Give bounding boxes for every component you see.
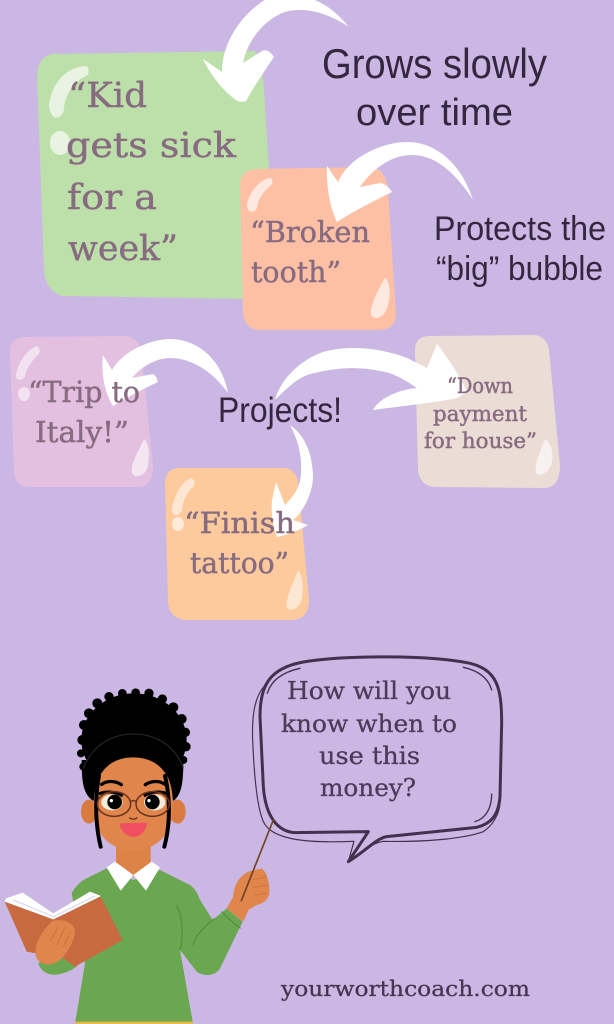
arrow: to trip bubble: [102, 339, 228, 406]
heading: protects the big bubble: [434, 210, 606, 288]
speech bubble: [252, 657, 502, 862]
illustration: teacher with book and pointer: [5, 688, 273, 1024]
footer: website: yourworthcoach.com: [280, 977, 530, 1001]
speech bubble text: money?: [320, 774, 416, 802]
book cover: [5, 897, 123, 967]
pointer stick: [241, 820, 273, 901]
panel: down payment bubble: [415, 335, 560, 488]
text: down payment for house: [424, 374, 537, 453]
text: broken tooth: “Broken: [250, 215, 370, 249]
sweater: [72, 868, 243, 1022]
text: kid gets sick: “Kid: [68, 76, 147, 116]
text: down payment for house: for house”: [424, 429, 537, 453]
left sleeve: [38, 937, 90, 975]
text: finish tattoo: [184, 506, 295, 580]
heading: protects the big bubble: “big” bubble: [436, 250, 603, 288]
face: [94, 757, 173, 851]
text: kid gets sick: week”: [68, 229, 178, 269]
text: finish tattoo: “Finish: [184, 506, 295, 540]
glasses: [97, 792, 169, 816]
text: kid gets sick: [66, 76, 237, 269]
panel: trip to Italy bubble: [10, 336, 153, 487]
speech bubble text: know when to: [281, 710, 457, 738]
hair: [77, 688, 191, 801]
pointing hand and wrist: [227, 868, 269, 922]
text: trip to Italy: Italy!”: [35, 415, 129, 449]
ears: [81, 800, 186, 824]
collar: [107, 862, 160, 891]
heading: grows slowly over time: [322, 40, 547, 134]
heading: protects the big bubble: Protects the: [434, 210, 606, 248]
text: trip to Italy: [28, 375, 140, 449]
speech bubble text: How will you: [287, 677, 451, 705]
heading: grows slowly over time: Grows slowly: [322, 40, 547, 87]
arrow: to broken tooth bubble: [327, 142, 473, 222]
text: trip to Italy: “Trip to: [28, 375, 140, 409]
text: finish tattoo: tattoo”: [190, 546, 289, 580]
text: kid gets sick: for a: [67, 178, 157, 218]
mouth: [120, 823, 147, 837]
book pages: [5, 892, 101, 919]
text: broken tooth: [250, 215, 370, 289]
text: kid gets sick: gets sick: [66, 126, 237, 166]
heading: projects: Projects!: [218, 391, 342, 430]
heading: grows slowly over time: over time: [356, 92, 513, 134]
text: down payment for house: “Down: [447, 374, 513, 398]
nose: [129, 818, 137, 819]
braids: [96, 776, 169, 847]
text: broken tooth: tooth”: [251, 255, 341, 289]
eyes: [99, 792, 168, 810]
arrow: to kid bubble: [203, 0, 349, 102]
arrow: to down payment bubble: [275, 344, 467, 410]
speech bubble text: [281, 677, 457, 802]
eyebrows: [102, 781, 165, 785]
headband: [83, 734, 183, 768]
neck: [116, 843, 151, 877]
panel: finish tattoo bubble: [165, 468, 309, 620]
speech bubble text: use this: [319, 742, 420, 770]
panel: broken tooth bubble: [240, 167, 396, 330]
panel: kid gets sick bubble: [37, 51, 269, 299]
text: down payment for house: payment: [433, 402, 528, 426]
holding hand: [36, 920, 75, 964]
arrow: to finish tattoo bubble: [272, 425, 313, 537]
sweater fold lines: [177, 905, 241, 950]
skirt hem: [75, 1021, 193, 1024]
